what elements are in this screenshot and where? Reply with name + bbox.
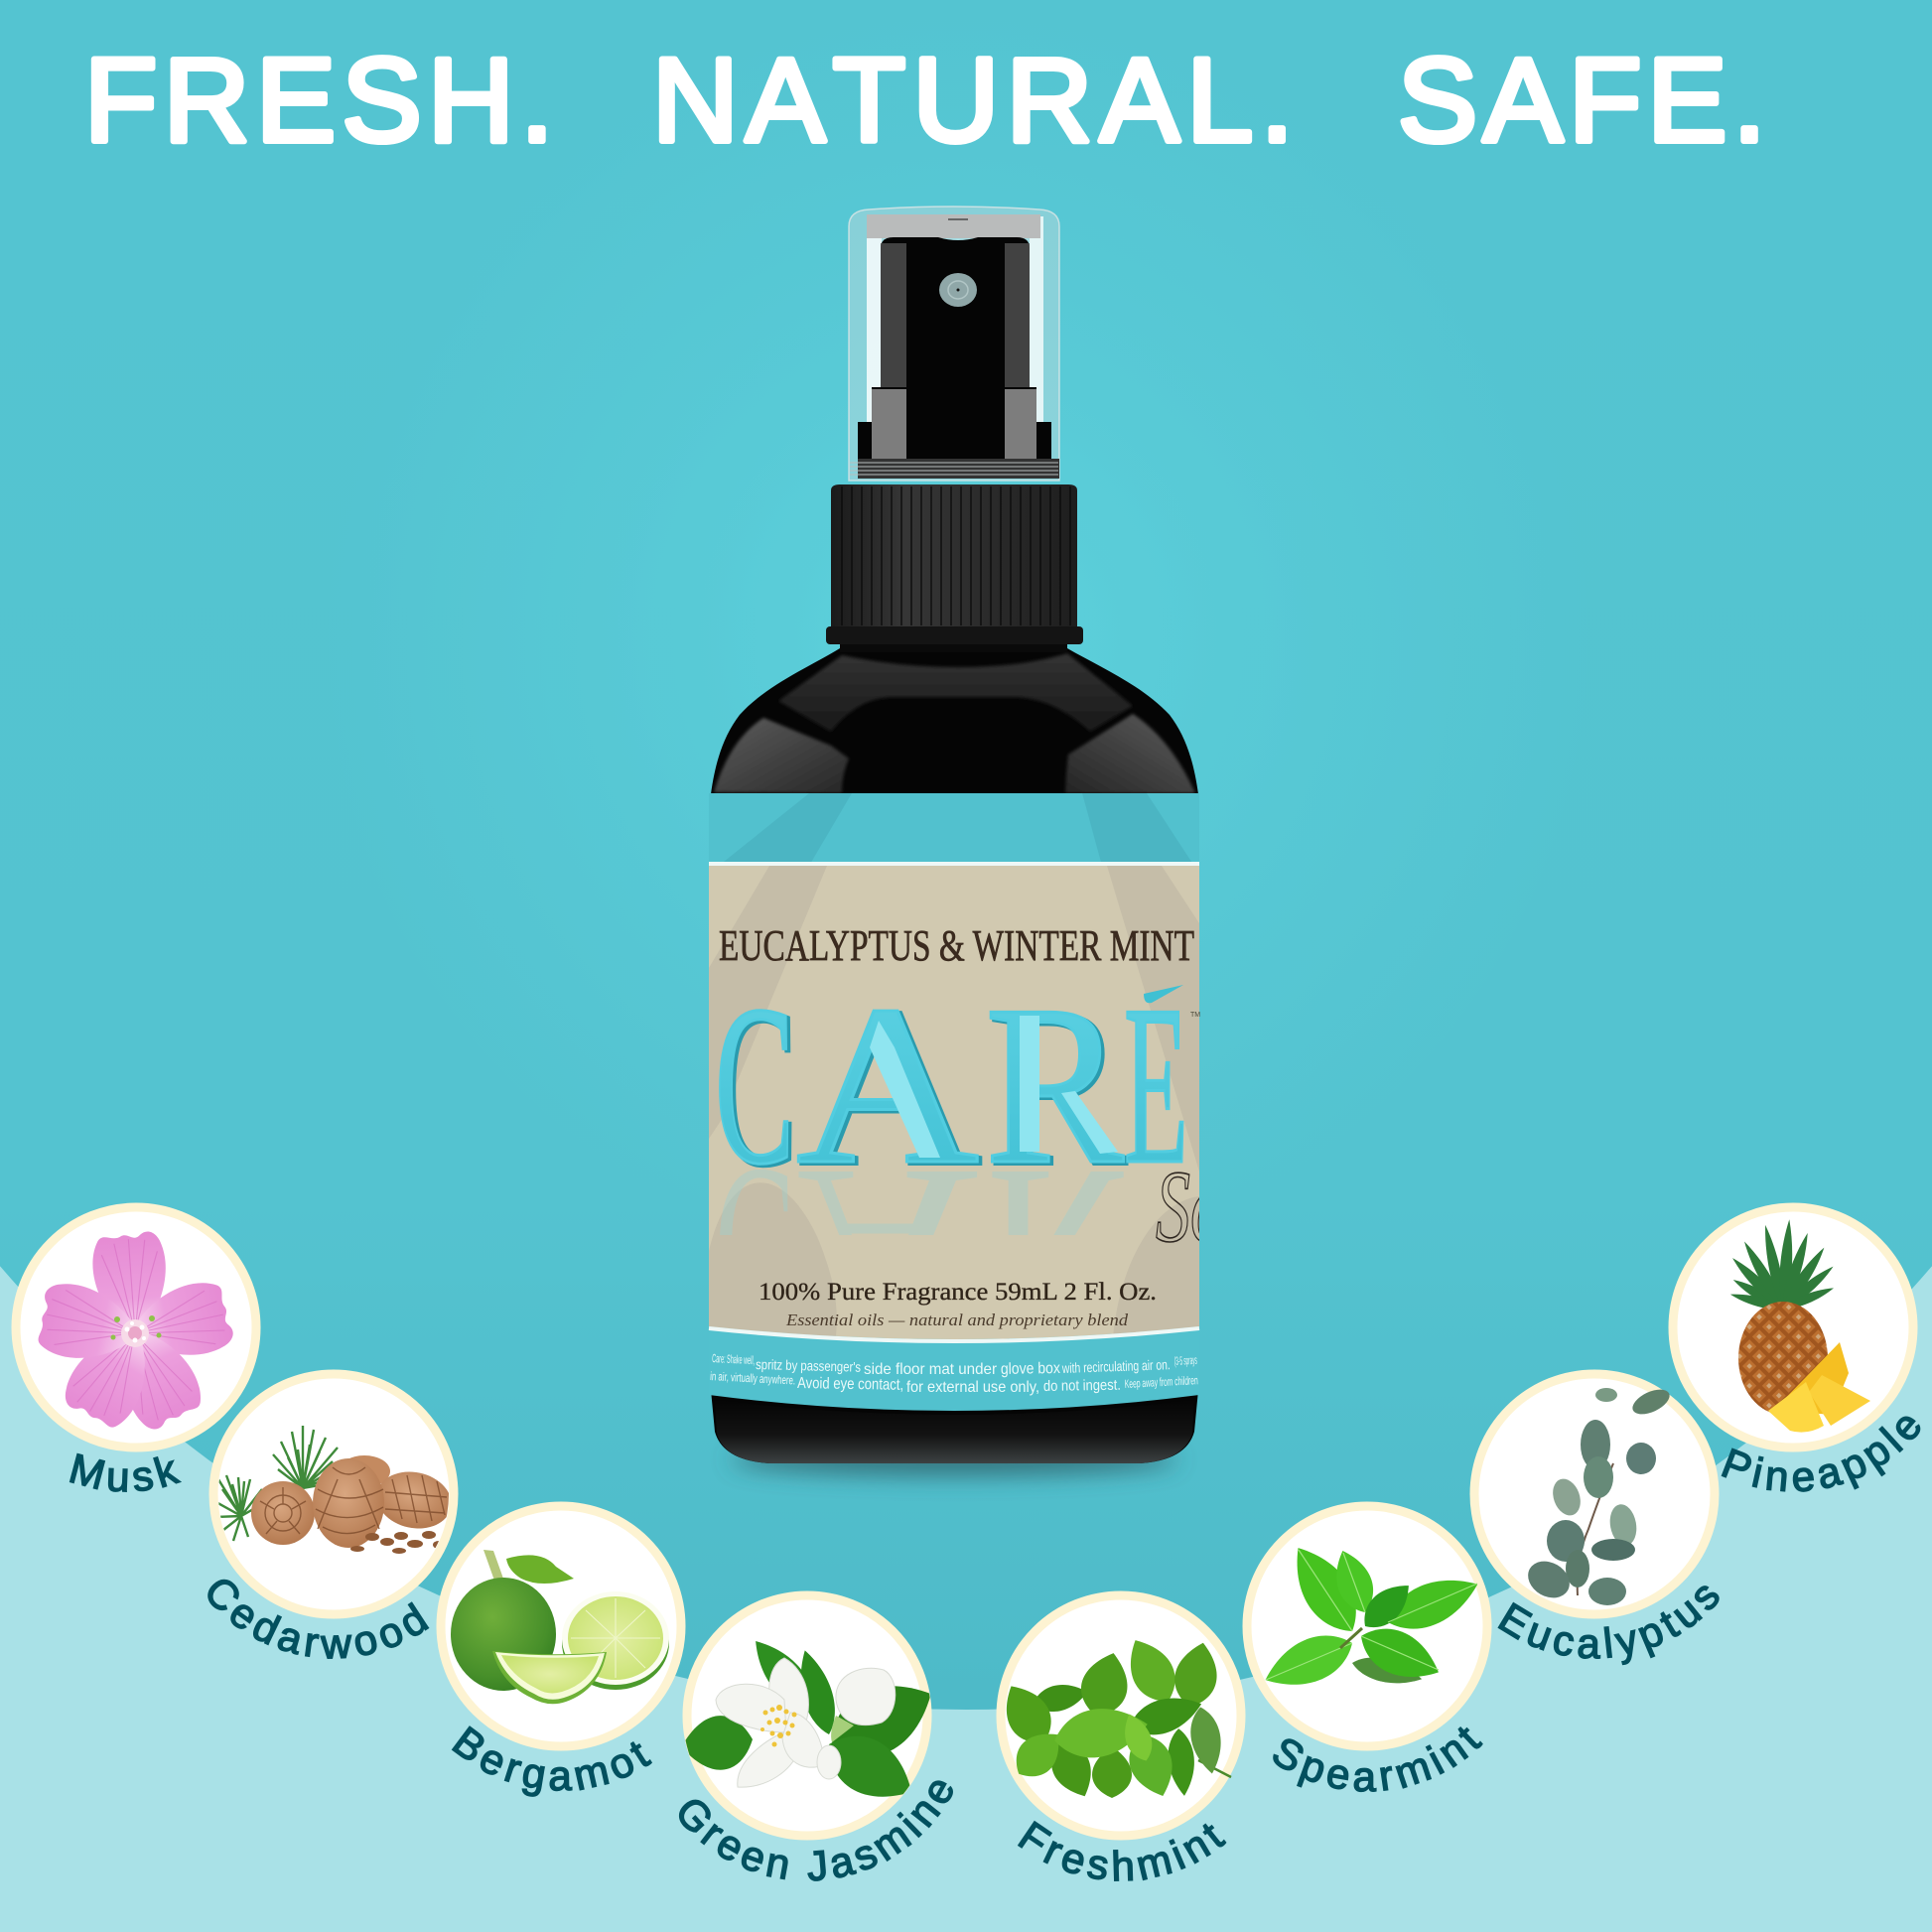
icon: pineapple [1728,1219,1870,1433]
ingredient: eucalyptus [1469,1370,1720,1666]
brand name: C [718,960,797,1213]
brand name: R [985,958,1125,1211]
ingredient: spearmint [1243,1501,1491,1793]
directions: side floor mat under [864,1361,998,1378]
neck [840,640,1067,652]
brand name [719,985,1183,1168]
spray nozzle [939,273,977,307]
ingredient: bergamot [437,1501,685,1797]
directions: in air, virtually anywhere. [710,1369,795,1387]
directions: Avoid eye contact, [797,1375,903,1394]
jasmine badge [687,1595,927,1836]
shoulder highlights [714,653,1195,793]
brand reflection: A [796,1122,979,1375]
label: É [1124,958,1188,1211]
ingredients line: Essential oils — natural and proprietary blend [785,1311,1129,1329]
eucalyptus badge [1474,1374,1715,1614]
brand name: R [988,960,1128,1213]
ingredient: musk [12,1203,260,1492]
background: glow behind bottle [323,0,1593,1271]
jasmine label: Green Jasmine [679,1780,953,1881]
directions: do not ingest. [1043,1377,1121,1395]
directions: spritz by passenger's [756,1356,861,1375]
directions [710,1351,1198,1396]
freshmint label: Freshmint [1017,1821,1227,1881]
brand reflection: R [985,1122,1125,1375]
musk label: Musk [69,1453,182,1492]
title: NATURAL. [652,34,1301,167]
brand reflection [720,1170,1124,1235]
ingredient: green jasmine [679,1590,953,1881]
brand name: A [799,960,982,1213]
freshmint badge [1001,1595,1241,1836]
musk badge [16,1207,256,1448]
product bottle [709,207,1225,1475]
cedarwood badge [213,1374,454,1614]
bottle base [715,1400,1194,1463]
trademark mark: TM [1190,1012,1200,1019]
cedarwood label: Cedarwood [207,1579,429,1659]
brand name: A [796,958,979,1211]
scent name: EUCALYPTUS & WINTER MINT [719,921,1194,970]
brand reflection: C [715,1122,794,1375]
clear overcap [849,207,1059,481]
brand name: C [715,958,794,1211]
ingredient: freshmint [997,1590,1245,1881]
bergamot label: Bergamot [451,1725,652,1797]
eucalyptus label: Eucalyptus [1497,1586,1720,1666]
directions: glove box [1001,1360,1060,1378]
bottle body [711,648,1198,1463]
ribbed collar [826,484,1083,644]
directions: with recirculating air on. [1061,1356,1171,1376]
icon: mint bunch [993,1630,1231,1804]
pump actuator [850,237,1059,479]
directions: for external use only, [906,1379,1039,1396]
title: SAFE. [1398,34,1772,167]
spearmint label: Spearmint [1273,1726,1483,1793]
script signature: So [1156,1150,1225,1264]
directions: Care: Shake well, [712,1351,756,1367]
bergamot badge [441,1506,681,1746]
label teal wrap [709,793,1199,1411]
icon: pine cones [214,1426,457,1554]
label [709,793,1225,1411]
icon: jasmine flower [685,1641,930,1797]
label white rules [709,864,1199,1341]
fragrance line: 100% Pure Fragrance 59mL 2 Fl. Oz. [759,1279,1157,1306]
title [84,34,1772,167]
label: (3-5 sprays [1173,1353,1197,1368]
icon: musk flower [33,1230,236,1435]
label watermark shapes [709,866,1199,1350]
spearmint badge [1247,1506,1487,1746]
pineapple label: Pineapple [1722,1416,1920,1492]
label watermark strokes [725,793,1191,862]
title: FRESH. [84,34,560,167]
icon: spearmint sprig [1257,1536,1485,1700]
icon: bergamot fruit [451,1550,669,1704]
bottle shadow [731,1444,1177,1475]
label beige panel [709,866,1199,1339]
ingredient: pineapple [1668,1203,1920,1492]
directions: Keep away from children [1124,1373,1198,1391]
ingredient: cedarwood [207,1370,459,1659]
brand highlights [870,1016,1118,1158]
icon: eucalyptus sprig [1521,1384,1673,1605]
pineapple badge [1673,1207,1913,1448]
